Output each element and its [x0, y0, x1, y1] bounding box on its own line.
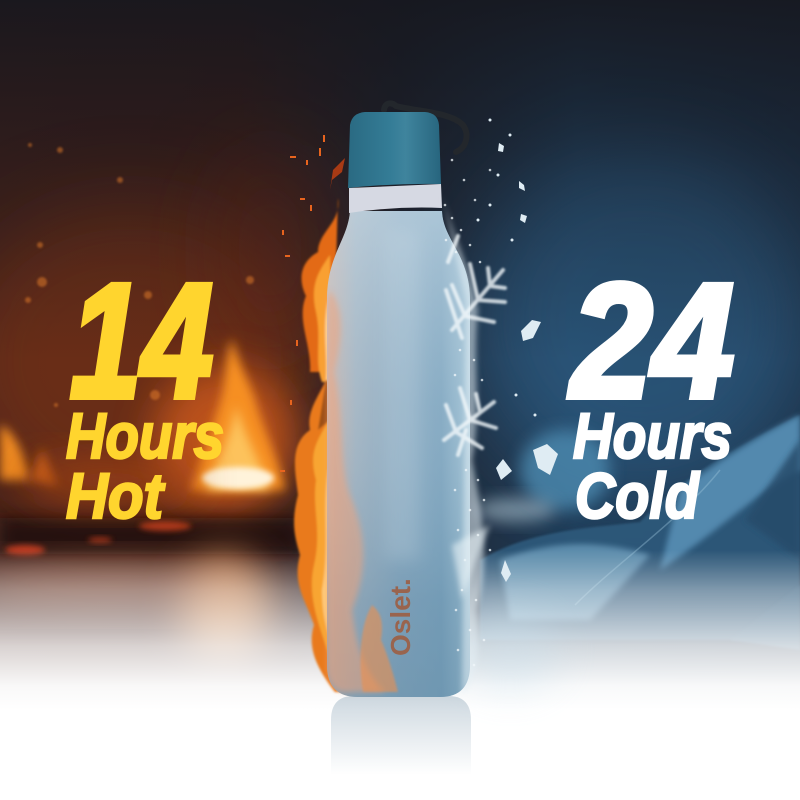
- bottle: [327, 103, 505, 697]
- bottle body: [327, 211, 470, 697]
- lid collar: [349, 184, 442, 213]
- white floor fade: [0, 550, 800, 710]
- snowflake lower: [444, 388, 496, 455]
- flames over bottle: [327, 290, 385, 692]
- cold number: 24: [568, 249, 734, 432]
- bottle reflection: [331, 696, 471, 775]
- hot number: 14: [70, 249, 213, 432]
- hot stat: [66, 249, 224, 532]
- cold stat: [568, 249, 734, 532]
- lid: [348, 112, 441, 188]
- background fire glow: [0, 143, 300, 665]
- sparks and ice shards: [280, 118, 558, 582]
- background ice formations: [475, 415, 800, 650]
- snowflake upper: [446, 236, 505, 338]
- flames behind bottle: [294, 198, 345, 692]
- hot label line two: Hot: [66, 460, 165, 532]
- cold label line one: Hours: [573, 400, 732, 472]
- brand name: Oslet.: [385, 578, 416, 656]
- bottle highlight: [385, 230, 420, 560]
- frost edge: [441, 159, 505, 695]
- cold label line two: Cold: [575, 460, 701, 532]
- bottle strap: [384, 103, 467, 152]
- hot label line one: Hours: [66, 400, 224, 472]
